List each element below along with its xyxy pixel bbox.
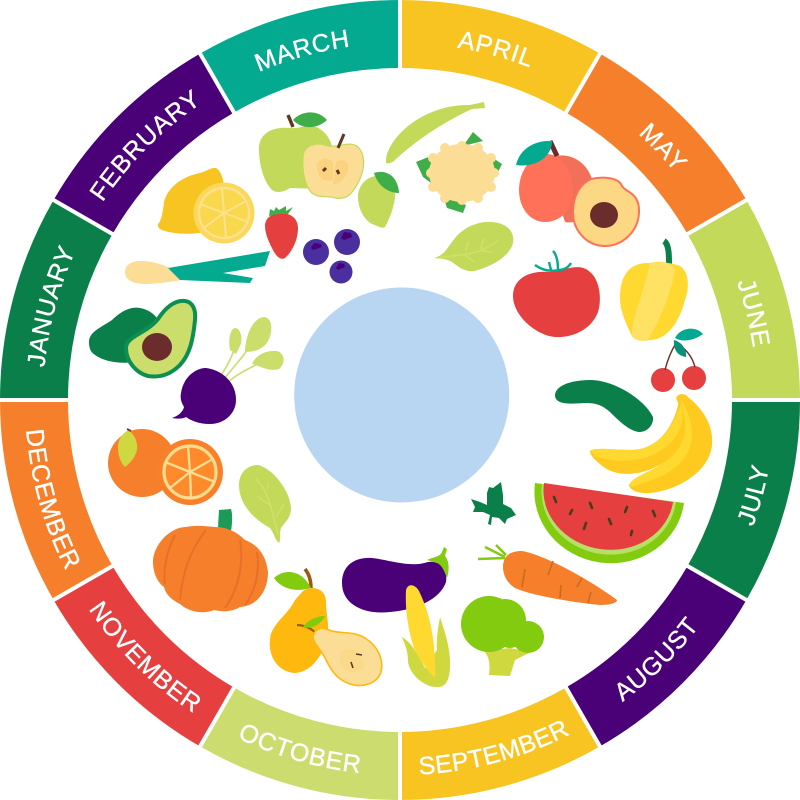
- icon: cucumber: [555, 380, 653, 432]
- segment: May: [568, 54, 746, 232]
- segment: March: [202, 0, 398, 112]
- icon: spinach leaf lower: [239, 465, 291, 543]
- icon: broccoli: [461, 596, 544, 676]
- segment: July: JULY: [738, 464, 768, 526]
- icon: corn: [402, 585, 450, 687]
- segment: August: AUGUST: [617, 616, 696, 702]
- icon: peach: [516, 141, 639, 246]
- icon: strawberry: [265, 206, 298, 259]
- icon: lemon: [158, 168, 254, 244]
- icon: parsley: [471, 482, 516, 525]
- icon: cauliflower: [416, 132, 502, 213]
- segment: December: [0, 402, 112, 598]
- segment: June: JUNE: [738, 280, 770, 347]
- icon: tomato: [513, 251, 600, 337]
- segment: October: OCTOBER: [240, 724, 360, 773]
- segment: May: MAY: [639, 122, 688, 168]
- icon: pea pod: [386, 102, 485, 163]
- icon: eggplant: [342, 547, 449, 613]
- segment: August: [568, 568, 746, 746]
- segment: February: [54, 54, 232, 232]
- icon: bananas: [590, 394, 712, 493]
- center circle: [294, 288, 509, 502]
- segment: February: FEBRUARY: [89, 88, 196, 201]
- segment: September: [402, 688, 598, 800]
- segment: September: SEPTEMBER: [420, 721, 570, 774]
- icon: carrot: [478, 545, 617, 605]
- icon: beet: [172, 317, 284, 424]
- icon: yellow pepper: [620, 241, 688, 341]
- segment: April: [402, 0, 598, 112]
- segment: December: DECEMBER: [26, 430, 80, 570]
- segment: January: [0, 202, 112, 398]
- segment: July: [688, 402, 800, 598]
- icon: small green fruit: [358, 172, 399, 228]
- segment: October: [202, 688, 398, 800]
- segment: March: MARCH: [254, 30, 348, 72]
- segment: November: [54, 568, 232, 746]
- icon: pear: [270, 569, 382, 686]
- icon: blueberries: [303, 229, 360, 284]
- icon: green apple: [259, 112, 364, 198]
- icon: orange: [108, 429, 223, 505]
- icon: leek: [125, 251, 270, 284]
- icon: cherries: [651, 329, 706, 392]
- segment: June: [688, 202, 800, 398]
- icon: watermelon: [534, 483, 684, 563]
- icon: spinach leaf top: [434, 222, 513, 271]
- segment: November: NOVEMBER: [90, 600, 200, 713]
- icon: pumpkin: [153, 509, 268, 612]
- segment: April: APRIL: [456, 32, 530, 68]
- segment: January: JANUARY: [28, 244, 73, 367]
- icon: avocado: [89, 301, 195, 377]
